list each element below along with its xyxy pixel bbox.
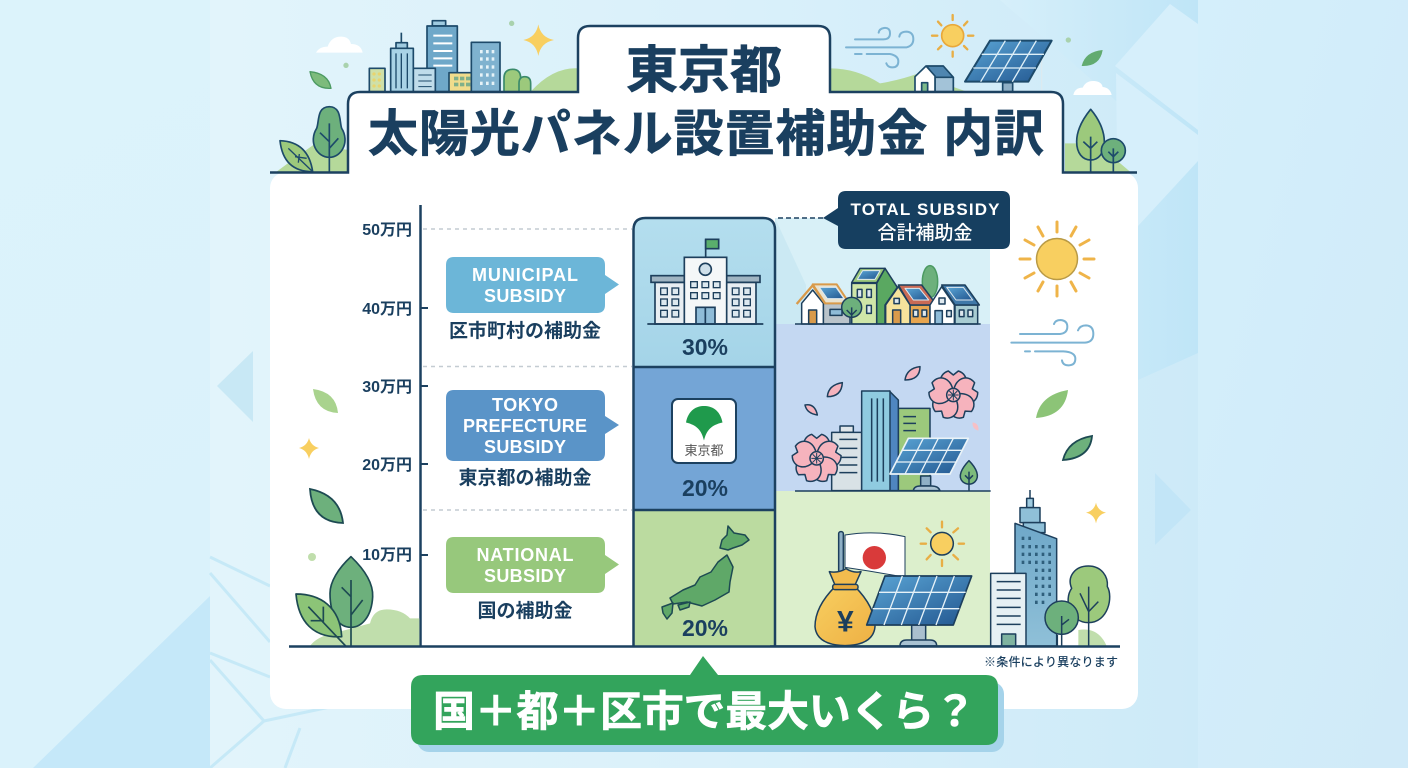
title tab outline bbox=[270, 26, 1137, 172]
callout: Tokyo subsidy: SUBSIDY bbox=[484, 437, 566, 457]
scene: Tokyo buildings and cherry blossoms bbox=[790, 367, 991, 491]
leaf bbox=[1082, 50, 1103, 66]
footnote: ※条件により異なります bbox=[984, 654, 1118, 669]
dot bbox=[1066, 37, 1071, 43]
callout: national subsidy bbox=[446, 537, 619, 593]
buildings bbox=[369, 21, 531, 92]
scene: national flag, yen bag and solar panel: ¥ bbox=[837, 606, 854, 639]
leaf with veins bbox=[280, 141, 313, 172]
callout: Tokyo subsidy bbox=[446, 390, 619, 461]
callout: municipal subsidy: MUNICIPAL bbox=[472, 265, 578, 285]
axis label 40: 40万円 bbox=[362, 301, 412, 318]
callout: national subsidy: NATIONAL bbox=[476, 545, 574, 565]
sparkle bbox=[299, 438, 319, 459]
caption: Tokyo: 東京都の補助金 bbox=[458, 467, 592, 489]
title line 1: 東京都 bbox=[626, 42, 782, 99]
sparkle bbox=[523, 24, 554, 56]
value: 30%: 30% bbox=[682, 334, 728, 360]
dashed gridlines bbox=[423, 229, 632, 510]
trees bbox=[1077, 109, 1125, 172]
axis label 30: 30万円 bbox=[362, 379, 412, 396]
icon: map of Japan bbox=[662, 526, 749, 619]
x axis baseline bbox=[289, 645, 1120, 648]
segment: municipal bbox=[633, 218, 775, 367]
icon: wind bbox=[1011, 320, 1093, 365]
chart area bbox=[289, 191, 1120, 647]
main white card bbox=[270, 172, 1138, 709]
segment: Tokyo bbox=[633, 367, 775, 510]
segment: national bbox=[633, 510, 775, 646]
icon: leaf dark bbox=[1063, 436, 1092, 460]
y axis bbox=[362, 205, 428, 647]
value: 20% Tokyo: 20% bbox=[682, 475, 728, 501]
leaf bbox=[310, 72, 331, 88]
icon: Tokyo emblem bbox=[672, 399, 736, 463]
icon: leaf bbox=[1036, 390, 1068, 418]
scene: wind, sun and solar panel at top right bbox=[831, 15, 1130, 172]
call to action banner: 国＋都＋区市で最大いくら？ bbox=[433, 688, 976, 735]
icon: sun bbox=[1020, 222, 1094, 296]
callout: total subsidy: 合計補助金 bbox=[877, 222, 973, 244]
value: 20% national: 20% bbox=[682, 615, 728, 641]
hill bbox=[831, 68, 967, 92]
scene: office tower and trees bbox=[991, 490, 1110, 646]
icon: Tokyo emblem: 東京都 bbox=[684, 443, 724, 458]
cloud bbox=[316, 37, 363, 53]
callout: total subsidy bbox=[778, 191, 1010, 249]
axis label 10: 10万円 bbox=[362, 547, 412, 564]
caption: national: 国の補助金 bbox=[477, 600, 573, 622]
stacked bar bbox=[633, 218, 775, 646]
icon: municipal building bbox=[647, 239, 763, 324]
leaf light bbox=[313, 389, 338, 413]
solar panel bbox=[965, 41, 1052, 92]
scene: city skyline at top left bbox=[277, 21, 578, 172]
callout: national subsidy: SUBSIDY bbox=[484, 566, 566, 586]
callout: municipal subsidy: SUBSIDY bbox=[484, 286, 566, 306]
dot bbox=[308, 553, 316, 561]
leaf bbox=[310, 489, 343, 523]
wind bbox=[846, 28, 913, 67]
callout: Tokyo subsidy: PREFECTURE bbox=[463, 416, 587, 436]
cloud bbox=[1073, 81, 1112, 95]
callout: municipal subsidy bbox=[446, 257, 619, 313]
sun bbox=[932, 15, 973, 57]
axis label 50: 50万円 bbox=[362, 222, 412, 239]
scene: large leaves at chart base bbox=[296, 557, 419, 646]
title line 2: 太陽光パネル設置補助金 内訳 bbox=[368, 106, 1044, 162]
axis label 20: 20万円 bbox=[362, 457, 412, 474]
tree bbox=[313, 107, 345, 172]
icons: left side leaves and sparkle bbox=[299, 389, 343, 561]
right side scene backgrounds bbox=[775, 218, 990, 646]
caption: municipal: 区市町村の補助金 bbox=[449, 320, 601, 342]
house bbox=[915, 66, 953, 92]
scene: houses with solar roofs bbox=[795, 266, 981, 324]
callout: Tokyo subsidy: TOKYO bbox=[492, 395, 558, 415]
callout: total subsidy: TOTAL SUBSIDY bbox=[850, 200, 1000, 219]
hill left bbox=[277, 145, 348, 172]
scene: national flag, yen bag and solar panel bbox=[770, 522, 991, 646]
call to action banner bbox=[411, 656, 1004, 752]
dots bbox=[343, 21, 514, 68]
title block bbox=[270, 26, 1137, 172]
hill bbox=[531, 68, 578, 92]
hill bbox=[1065, 143, 1130, 172]
